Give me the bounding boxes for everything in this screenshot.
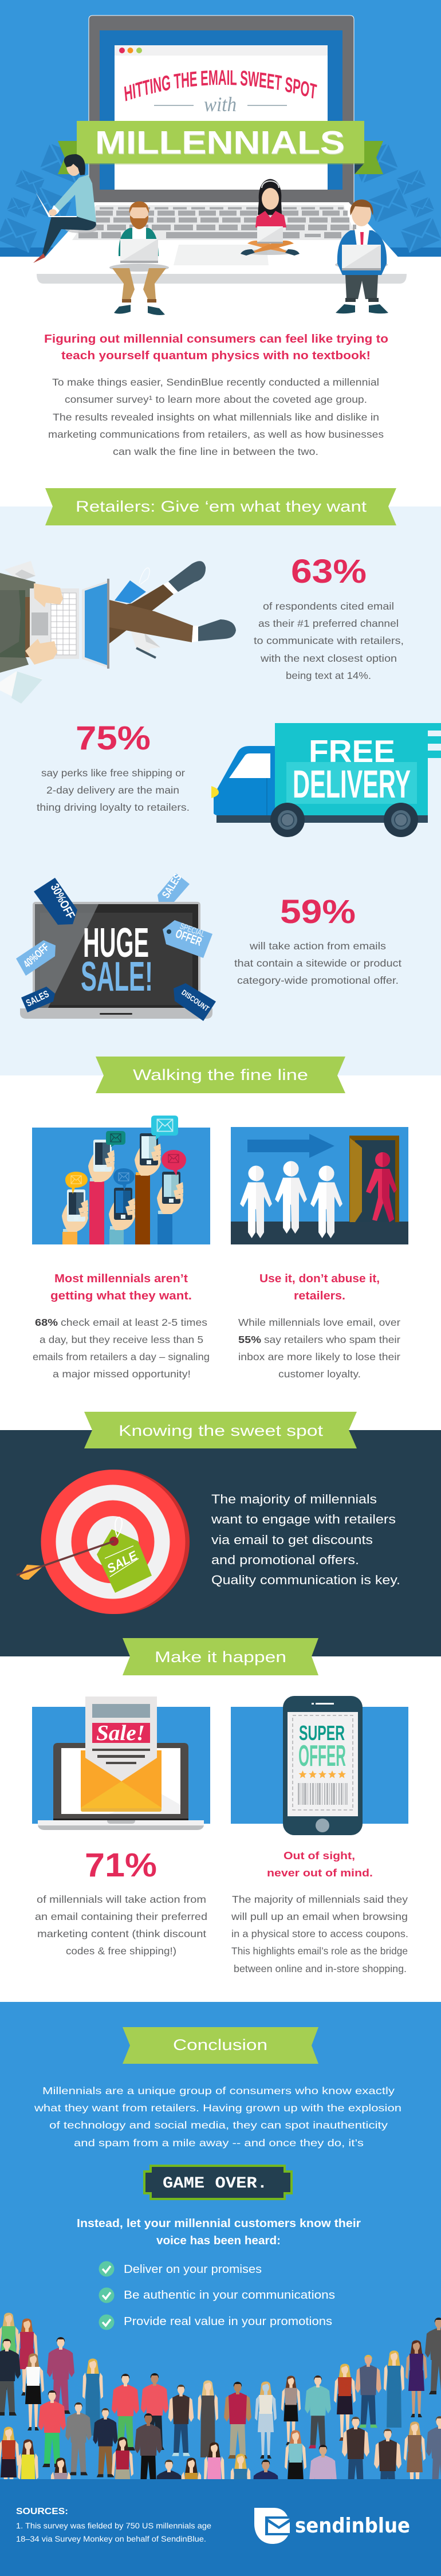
crowd of people: [0, 2312, 441, 2536]
ribbon: walking the fine line: Walking the fine line: [133, 1066, 308, 1083]
conclusion paragraph: and spam from a mile away -- and once they do, it’s: [74, 2137, 364, 2149]
person: woman with laptop: [241, 179, 300, 256]
column text: out of sight: between online and in-store shopping.: [234, 1963, 407, 1974]
sweet spot text: and promotional offers.: [211, 1553, 359, 1567]
sweet spot text: The majority of millennials: [211, 1492, 377, 1506]
panel: phone coupon: SUPER: [299, 1721, 345, 1745]
panel: phone coupon: OFFER: [298, 1739, 346, 1773]
intro heading: teach yourself quantum physics with no textbook!: [61, 350, 371, 362]
bold statement: voice has been heard:: [156, 2235, 281, 2247]
panel: footer: [0, 2479, 441, 2576]
intro paragraph: consumer survey¹ to learn more about the coveted age group.: [65, 394, 367, 405]
stat: 63%: of respondents cited email: [263, 600, 394, 612]
green ribbon: millennials: MILLENNIALS: [96, 125, 345, 162]
blue hand and phone: [157, 1150, 186, 1244]
column text: most millennials: [33, 1273, 210, 1380]
orange envelope: [81, 1750, 162, 1812]
stat: 59%: 59%: [280, 893, 356, 930]
game over badge: [143, 2165, 293, 2200]
column text: out of sight: in a physical store to access coupons.: [231, 1928, 408, 1939]
column text: use it, don't abuse it: Use it, don’t abuse it,: [259, 1273, 380, 1285]
ribbon: make it happen: Make it happen: [155, 1648, 286, 1666]
intro paragraph: The results revealed insights on what millennials like and dislike in: [53, 411, 379, 423]
column text: use it, don't abuse it: retailers.: [294, 1290, 345, 1302]
laptop base and keyboard: [37, 202, 407, 284]
intro heading: [44, 333, 388, 362]
bold statement: [77, 2217, 361, 2247]
sweet spot text: [211, 1492, 400, 1587]
ribbon: conclusion: [123, 2027, 318, 2064]
letter with sale: [85, 1697, 157, 1781]
column text: use it, don't abuse it: say retailers who spam their: [264, 1334, 400, 1345]
stat: 59%: [234, 893, 401, 986]
column text: use it, don't abuse it: [238, 1273, 400, 1380]
stat: 71%: an email containing their preferred: [35, 1911, 207, 1922]
title: with: with: [204, 93, 237, 116]
column text: out of sight: This highlights email’s role as the bridge: [231, 1945, 408, 1957]
white customers: [240, 1161, 342, 1238]
column text: most millennials: 68%: [35, 1317, 58, 1328]
illustration: free delivery truck: [211, 723, 441, 837]
stat: 75%: 2-day delivery are the main: [46, 784, 179, 796]
checklist: [99, 2261, 335, 2330]
person: bearded man: [109, 201, 169, 315]
intro paragraph: marketing communications from retailers, as well as how businesses: [48, 429, 384, 440]
stat: 63%: to communicate with retailers,: [254, 635, 404, 646]
stat: 59%: that contain a sitewide or product: [234, 957, 401, 969]
green ribbon: millennials: [58, 121, 383, 174]
conclusion paragraph: [34, 2085, 401, 2149]
illustration: huge sale laptop: SALE!: [81, 954, 153, 1000]
illustration: huge sale laptop: SALES: [24, 988, 51, 1009]
panel: hands holding phones: [32, 1116, 210, 1244]
ribbon: knowing the sweet spot: Knowing the sweet spot: [119, 1422, 324, 1439]
stat: 63%: [254, 553, 404, 681]
sources: 1. This survey was fielded by 750 US millennials age: [16, 2521, 211, 2530]
sources: SOURCES:: [16, 2507, 68, 2516]
illustration: target with sale tag: [17, 1470, 190, 1614]
title: hitting the email sweet spot: HITTING THE EMAIL SWEET SPOT: [124, 70, 317, 101]
column text: use it, don't abuse it: inbox are more likely to lose their: [238, 1351, 400, 1362]
column text: out of sight: Out of sight,: [284, 1850, 355, 1862]
stat: 71%: 71%: [85, 1847, 157, 1884]
stat: 63%: with the next closest option: [260, 653, 397, 664]
ribbon: conclusion: Conclusion: [173, 2036, 267, 2053]
panel: header: [0, 0, 441, 315]
sweet spot text: via email to get discounts: [211, 1533, 373, 1547]
panel: phone coupon: [231, 1696, 408, 1835]
stat: 71%: codes & free shipping!): [66, 1945, 176, 1957]
sendinblue logo: sendinblue: [295, 2514, 410, 2538]
arrow: [247, 1134, 334, 1158]
stat: 63%: being text at 14%.: [286, 670, 371, 681]
stat: 75%: 75%: [76, 720, 151, 757]
intro paragraph: To make things easier, SendinBlue recently conducted a millennial: [52, 376, 379, 388]
stat: 71%: marketing content (think discount: [37, 1928, 206, 1939]
column text: use it, don't abuse it: 55%: [238, 1334, 261, 1345]
column text: most millennials: a major missed opportunity!: [53, 1368, 191, 1380]
illustration: free delivery truck: FREE: [309, 733, 395, 769]
ribbon: retailers: [45, 488, 396, 525]
illustration: huge sale laptop: SPECIAL: [179, 921, 206, 939]
panel: conclusion: [0, 2002, 441, 2536]
column text: most millennials: emails from retailers a day – signaling: [33, 1351, 210, 1362]
green ribbon: millennials: MILLENNIALS: [95, 124, 345, 161]
brown hand and phone: [135, 1116, 178, 1244]
column text: use it, don't abuse it: While millennials love email, over: [238, 1317, 400, 1328]
checklist: Provide real value in your promotions: [124, 2315, 332, 2328]
checklist: Be authentic in your communications: [124, 2289, 335, 2302]
intro paragraph: can walk the fine line in between the two.: [113, 446, 318, 457]
panel: sweet spot background: [0, 1430, 441, 1656]
column text: out of sight: never out of mind.: [267, 1867, 373, 1879]
game over badge: GAME OVER.: [163, 2175, 267, 2193]
sources: [16, 2507, 211, 2543]
person: man with tie: [335, 199, 388, 313]
checklist: Deliver on your promises: [124, 2263, 262, 2276]
stat: 59%: category-wide promotional offer.: [237, 975, 399, 986]
person: man sitting at left: [33, 154, 97, 263]
illustration: target with sale tag: SALE: [105, 1548, 140, 1576]
intro heading: Figuring out millennial consumers can feel like trying to: [44, 333, 388, 345]
illustration: huge sale laptop: OFFER: [174, 927, 203, 949]
illustration: huge sale laptop: 30%OFF: [48, 882, 77, 921]
red customer leaving: [366, 1152, 397, 1222]
pink hand and phone: [88, 1131, 125, 1244]
stat: 75%: [37, 720, 190, 813]
door: [349, 1136, 399, 1222]
column text: out of sight: [231, 1850, 408, 1974]
illustration: huge sale laptop: 40%OFF: [21, 941, 52, 971]
stat: 63%: 63%: [291, 553, 367, 590]
illustration: huge sale laptop: SALES: [160, 872, 184, 901]
sweet spot text: Quality communication is key.: [211, 1573, 400, 1587]
column text: most millennials: Most millennials aren’t: [54, 1273, 188, 1285]
stat: 75%: say perks like free shipping or: [41, 767, 185, 779]
letter with sale: Sale!: [96, 1721, 145, 1745]
panel: email on laptop: [32, 1697, 210, 1830]
conclusion paragraph: Millennials are a unique group of consumers who know exactly: [42, 2085, 395, 2096]
stat: 59%: will take action from emails: [249, 940, 386, 952]
bold statement: Instead, let your millennial customers know their: [77, 2217, 361, 2230]
yellow hand and phone: [62, 1172, 88, 1244]
ribbon: make it happen: [123, 1638, 318, 1675]
panel: intro: [44, 333, 388, 457]
laptop screen: [89, 15, 354, 205]
panel: retailers background: [0, 506, 441, 1075]
intro paragraph: [48, 376, 384, 457]
column text: out of sight: will pull up an email when browsing: [231, 1911, 408, 1922]
background envelopes: [0, 143, 441, 253]
conclusion paragraph: what they want from retailers. Having grown up with the explosion: [34, 2102, 401, 2114]
illustration: man typing from above: [0, 561, 236, 704]
stat: 63%: as their #1 preferred channel: [258, 618, 399, 629]
column text: most millennials: a day, but they receive less than 5: [40, 1334, 203, 1345]
column text: use it, don't abuse it: customer loyalty.: [278, 1368, 361, 1380]
column text: out of sight: The majority of millennials said they: [232, 1894, 408, 1905]
column text: most millennials: check email at least 2-5 times: [61, 1317, 207, 1328]
sendinblue logo: [254, 2508, 410, 2544]
rating stars: [299, 1770, 346, 1778]
ribbon: retailers: Retailers: Give ‘em what they want: [76, 498, 367, 515]
conclusion paragraph: of technology and social media, they can spot inauthenticity: [49, 2119, 388, 2131]
sources: 18–34 via Survey Monkey on behalf of SendinBlue.: [16, 2534, 206, 2543]
stat: 71%: [35, 1847, 207, 1957]
column text: most millennials: getting what they want.: [50, 1290, 192, 1302]
sweet spot text: want to engage with retailers: [211, 1512, 396, 1526]
illustration: huge sale laptop: HUGE: [83, 920, 149, 966]
teal hand and phone: [109, 1168, 135, 1244]
ribbon: knowing the sweet spot: [84, 1412, 357, 1448]
illustration: huge sale laptop: DISCOUNT: [180, 988, 211, 1013]
illustration: huge sale laptop: [16, 872, 216, 1021]
panel: leaving customer: [231, 1127, 408, 1244]
stat: 75%: thing driving loyalty to retailers.: [37, 802, 190, 813]
stat: 71%: of millennials will take action from: [37, 1894, 206, 1905]
ribbon: walking the fine line: [96, 1057, 345, 1093]
